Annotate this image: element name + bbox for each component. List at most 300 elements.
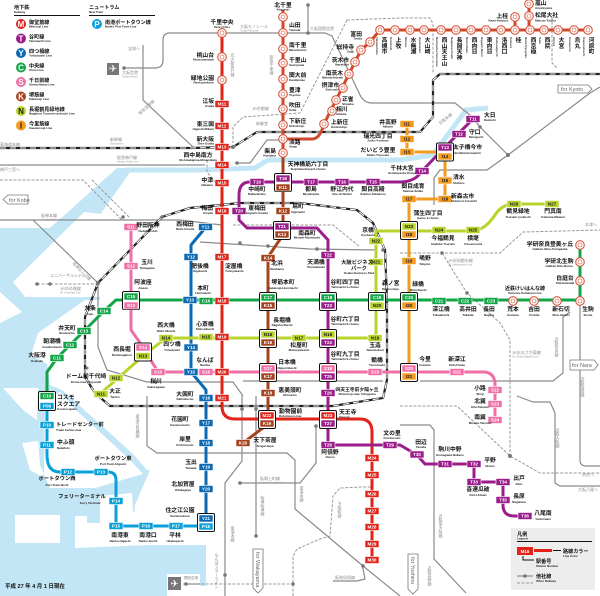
station names: Tanimachi and Imazatosuji: Zuiko 4-chome [367,138,389,142]
station names: west: Nishi-Umeda [176,227,194,231]
station boxes: Nagahori: N24 [435,228,444,233]
station names: west: 平林 [169,533,181,539]
station names: vertical row: 高槻市 [380,36,387,56]
station names: centre: 長堀橋 [273,318,291,324]
station names: north: Arashiyama [535,6,552,10]
legend: subway lines: 千日前線 [29,78,49,84]
station boxes: Sennichimae: S23 [491,402,500,407]
station names: Tanimachi and Imazatosuji: 大日 [484,113,496,119]
station names: east: 近鉄けいはんな線 [505,286,545,292]
station names: west: Nishi-Ohashi [157,329,175,333]
station names: west: Hirabayashi [166,539,184,543]
other railway labels: 新御堂 [256,120,268,126]
station names: Tanimachi and Imazatosuji: Tanimachi 9-chome [331,357,359,361]
station names: north: 淡路 [289,140,301,146]
station names: north: Sojiji [347,50,354,54]
station boxes: Nagahori: N22 [372,239,381,244]
station names: west: 中ふ頭 [57,440,74,446]
station boxes: Yotsubashi: Y14 [187,345,196,350]
station boxes: Nagahori [94,200,559,398]
legend: new tram [89,5,155,29]
station names: west: 四ツ橋 [163,342,181,348]
other railway labels: 神戸三宮へ [0,166,20,172]
station names: Tanimachi and Imazatosuji: Sembayashi-Omiya [388,171,416,175]
station names: west: Tamagawa [139,266,155,270]
station boxes: Port Town: P11 [43,443,51,448]
station names: north: Nakatsu [201,183,213,187]
station names: Tanimachi and Imazatosuji: Temmabashi [307,265,325,269]
arrow: for Yoshino [408,554,418,594]
station names: Tanimachi and Imazatosuji: 喜連瓜破 [466,487,490,493]
station names: east: Shin-Fukae [449,363,465,367]
other railway labels: 木津へ [585,221,597,227]
line: Port Town [47,406,206,526]
station names: west: Osakako [31,359,43,363]
station names: west: 桜川 [150,379,162,385]
station names: vertical row: 洛西口 [500,36,507,56]
station names: Tanimachi and Imazatosuji: Tanimachi 6-chome [331,322,359,326]
station names: north: Senri-Chuo [214,25,230,29]
station boxes: Sakaisuji: K11 [279,185,288,190]
station names: north: 上新庄 [331,120,348,126]
station names: Tanimachi and Imazatosuji: Kire-Uriwari [469,493,487,497]
station boxes: Midosuji: M15 [218,181,227,186]
station names: Tanimachi and Imazatosuji: 阿倍野 [321,450,339,456]
station names: west: Ferry Terminal [80,501,100,505]
station names: north: 富田 [350,32,362,38]
station names: vertical row: 西京極 [529,37,536,55]
station names: Tanimachi and Imazatosuji: 都島 [305,187,317,193]
station names: Tanimachi and Imazatosuji: 東梅田 [248,206,266,212]
station names: north: 南千里 [289,43,306,49]
station names: centre: Matsuyamachi [289,348,309,352]
station names: west: Taisho [110,395,120,399]
station boxes: Port Town: P18 [202,524,211,529]
other railway labels: 阪和貝塚線 [335,574,355,580]
station names: west: Trade Center-mae [56,428,82,432]
station names: Tanimachi and Imazatosuji: Moriguchi [469,135,483,139]
line: Sakaisuji [243,153,283,443]
legend: subway lines: I [20,122,22,130]
station names: east: 北巽 [474,399,486,405]
station names: east: 学研北生駒 [544,259,574,265]
legend: subway lines: 御堂筋線 [29,20,49,26]
station boxes: Tanimachi: T34 [499,480,507,485]
station boxes: Sakaisuji: K19 [263,421,272,426]
station names: west: Nodahanshin [138,229,158,233]
other railway labels: 近鉄長野線 [428,565,432,587]
station boxes: Nagahori: N26 [510,202,519,207]
station names: west: 大正 [109,389,121,395]
station names: east [410,207,594,425]
station boxes: Sakaisuji: K18 [264,391,273,396]
station boxes: Chuo: C12 [66,343,75,348]
station names: Tanimachi and Imazatosuji: 平野 [484,458,496,464]
station names: vertical row: Minase [404,37,408,48]
station names: vertical row: 河原町 [587,36,594,55]
station names: east: Midoribashi [410,288,427,292]
station boxes: Tanimachi: T23 [324,303,332,308]
other railway labels: 近鉄南大阪線 [438,513,444,539]
station boxes: Tanimachi: T35 [499,498,507,503]
station boxes: Sennichimae: S19 [371,370,380,375]
panel: map key: Line Color [563,554,579,558]
station boxes: Sennichimae: S15 [154,370,163,375]
legend: subway lines: 堺筋線 [29,92,44,98]
station names: east: Kintetsu Keihanna Line [508,291,542,295]
legend: subway lines: 長堀鶴見緑地線 [29,107,65,113]
legend: subway lines: 四つ橋線 [29,49,49,55]
station boxes: Tanimachi: T15 [369,180,377,185]
station names: Tanimachi and Imazatosuji: 守口 [469,130,481,136]
arrow: for Nara: for Nara [572,363,593,369]
station boxes: Sennichimae: S20 [405,366,414,371]
station boxes: Nagahori: N12 [112,376,121,381]
line: Nagahori Tsurumi-ryokuchi [100,204,552,394]
station names: north: Aikawa [336,112,347,116]
station boxes: Sennichimae: S17 [264,366,273,371]
station names: vertical row: 水無瀬 [409,36,416,56]
station names: east: 白庭台 [556,276,574,282]
station boxes: Yotsubashi: Y18 [202,441,211,446]
station names: east: 新石切 [552,307,570,313]
other railway labels: Hankai Uemachi Line [260,480,285,484]
station names: west: 花園町 [171,417,189,423]
legend: subway lines: Midosuji Line [29,24,48,28]
station boxes: Midosuji: M23 [324,413,333,418]
station names: north: Shin-Osaka [197,142,214,146]
station boxes: Sennichimae: S24 [491,418,500,423]
station names: Tanimachi and Imazatosuji: 出戸 [513,476,525,482]
legend: subway lines: Chuo Line [29,68,44,72]
station boxes: Port Town: P17 [172,524,181,529]
station names: Tanimachi and Imazatosuji: Shitennoji-mae Yuhigaoka [338,392,376,396]
station names: centre: 大国町 [176,392,194,398]
station boxes: Tanimachi: T29 [386,443,394,448]
station boxes: Midosuji: M14 [218,163,227,168]
other railway labels: 東海道本線 [0,141,20,147]
icon: Kansai Airport: ✈ [170,579,179,590]
station names: west: 西長堀 [113,347,131,353]
station names: vertical row: Nishi-Kyogoku [524,37,528,58]
station names: centre [176,203,400,448]
station names: north: 相川 [336,107,348,113]
station names: west: 朝潮橋 [43,339,61,345]
station names: east: Gakken Nara-Tomigaoka [533,247,568,251]
station boxes: Tanimachi: T25 [324,374,332,379]
station names: east: Minami-Tatsumi [469,421,491,425]
station names: vertical row: Rakusaiguchi [495,37,499,57]
station names: centre: Hommachi [195,291,211,295]
station names: north: Ryokuchikoen [193,80,214,84]
station names: vertical row: Nishiyama-Tennozan [435,37,439,67]
station names: west: 玉川 [141,260,153,266]
legend: subway lines: Nagahori Tsurumi-ryokuchi Line [29,112,75,116]
station names: Tanimachi and Imazatosuji: Itakano [383,124,393,128]
station boxes: Imazatosuji [400,120,452,380]
station boxes: Sennichimae: S18 [324,366,333,371]
legend: subway lines: M [18,20,25,29]
legend: new tram: ニュートラム [89,5,119,11]
icon: Osaka Airport [107,63,119,75]
station names: north: 上桂 [496,14,508,20]
station names: centre: Daikokucho [176,397,194,401]
arrow: for Kobe [3,195,30,204]
station boxes: Imazatosuji: I19 [406,259,413,264]
station names: Tanimachi and Imazatosuji: 駒川中野 [438,447,462,453]
station names: Tanimachi and Imazatosuji: Noe-Uchindai [332,192,352,196]
station boxes: Port Town [40,402,213,530]
station boxes: Midosuji: M17 [218,255,227,260]
station names: east: 門真南 [544,209,562,215]
station boxes: Yotsubashi [183,224,213,522]
station names: Tanimachi and Imazatosuji: 瑞光四丁目 [364,134,392,140]
station names: Tanimachi and Imazatosuji: Sekime-Seiiku [403,189,423,193]
other railway labels: ユニバーサルシティ [50,272,86,278]
station names: east: 蒲生四丁目 [414,211,442,217]
icon: Kansai Airport [168,575,200,590]
station names: north: Awaji [289,144,297,148]
station names: Tanimachi and Imazatosuji: Minami-Morimachi [294,236,320,240]
station names: west: Asashiobashi [42,345,62,349]
station names: centre: 堺筋本町 [271,280,295,286]
station names: Tanimachi and Imazatosuji: Miyakojima [303,192,319,196]
station names: west: Kujo [87,312,93,316]
station names: vertical row: 大宮 [557,36,564,50]
station names: north: 総持寺 [337,45,354,51]
station names: Tanimachi and Imazatosuji: Taishibashi-Imaichi [453,151,481,155]
station boxes: Port Town: P13 [97,470,106,475]
other railway labels: 南海汐見橋線 [136,413,140,439]
station names: Tanimachi and Imazatosuji: Sekime-Takadono [360,192,386,196]
station names: vertical row: Kawaramachi [582,37,586,57]
station boxes: Tanimachi: T11 [469,117,477,122]
station names: west: 野田阪神 [136,223,160,229]
line: Tanimachi [239,119,525,516]
line: Sennichimae [131,227,495,420]
panel: map key: Legend [517,536,528,540]
station names: east: 新深江 [448,357,466,363]
station boxes: Imazatosuji: I18 [406,232,413,237]
station names: vertical row: 西向日 [470,37,477,56]
station boxes: Yotsubashi: Y20 [202,487,211,492]
station names: north: Kunijima [263,154,276,158]
station names: east: Tsurumi-ryokuchi [505,215,531,219]
station boxes: Midosuji: M13 [218,145,227,150]
station boxes: Sakaisuji: K17 [264,374,273,379]
station boxes: Yotsubashi: Y17 [202,421,211,426]
station names: centre: Namba [200,363,210,367]
station boxes: Nagahori: N27 [548,202,557,207]
station boxes: Imazatosuji: I21 [406,374,413,379]
station names: east: 緑橋 [412,282,424,288]
station names: north: 山田 [289,23,301,29]
station names: Tanimachi and Imazatosuji: 南森町 [298,231,316,237]
station names: west: 弁天町 [58,326,76,332]
line: Imazatosuji [407,124,445,377]
legend: subway lines: 中央線 [29,64,44,70]
station boxes: Tanimachi: T20 [235,209,243,214]
station boxes: Midosuji: M24 [368,456,377,461]
station names: north: 千里山 [289,58,306,64]
station names: east: Kita-Tatsumi [471,405,489,409]
station names: north: Minamisenri [289,48,307,52]
station names: centre: 恵美須町 [278,388,302,394]
other railway labels: Osaka Airport [122,74,138,78]
JR lines [0,74,600,406]
station boxes: Chuo: C14 [100,309,109,314]
station names: Tanimachi and Imazatosuji: Fuminosato [384,436,401,440]
station boxes: Tanimachi: T27 [324,421,332,426]
station names: west: 阿波座 [134,280,152,286]
station boxes: Tanimachi: T21 [278,224,286,229]
station boxes: Nagahori: N21 [372,260,381,265]
station boxes: Nagahori: N14 [162,336,171,341]
station names: east: Kadoma-Minami [541,215,565,219]
other railway labels: 新幹線 [110,137,122,142]
other railway labels: Hankyu Kobe Line [117,160,139,164]
station boxes: Nagahori: N13 [139,354,148,359]
legend: new tram: P [94,20,100,29]
arrow: for Wakayama [253,549,263,593]
station names: east: 学研奈良登美ヶ丘 [527,242,573,248]
legend: new tram: 南港ポートタウン線 [105,20,151,26]
station boxes: Midosuji: M29 [368,542,377,547]
station names: east: 南巽 [474,415,486,421]
other railway labels: なんばスターライン [214,552,220,589]
station names: north: 東三国 [197,122,214,128]
station names: west: Tamade [185,466,197,470]
other railway labels: 阪神なんば線 [72,260,93,281]
other railway labels: JRおおさか東線 [512,350,541,355]
station names: east: Fukaebashi [433,313,449,317]
station boxes: Midosuji: M22 [263,413,272,418]
station names: Tanimachi and Imazatosuji: 田辺 [415,440,427,446]
station boxes: Port Town: P15 [112,524,121,529]
station names: north: Kitasenri [277,8,290,12]
station names: Tanimachi and Imazatosuji: 太子橋今市 [453,145,482,151]
other railway labels: 大阪空港 [122,70,138,75]
station names: west: フェリーターミナル [58,494,106,500]
station boxes: Nagahori: N15 [202,335,211,340]
station boxes: Midosuji: M19 [218,335,227,340]
station names: north [179,0,558,215]
station boxes: Sennichimae: S22 [491,388,500,393]
station names: Tanimachi and Imazatosuji: 四天王寺前夕陽ヶ丘 [335,388,379,393]
station names: Tanimachi and Imazatosuji: 中崎町 [248,187,266,193]
station names: centre: 天下茶屋 [253,438,277,444]
station names: Tanimachi and Imazatosuji: Yaominami [535,517,551,521]
station names: west: 住之江公園 [166,508,194,514]
other railway labels: Osaka Monorail [240,28,259,32]
station names: east: 生駒 [582,307,594,313]
arrow: for Wakayama: for Wakayama [254,552,260,588]
station names: west: 大阪港 [28,353,46,359]
station names: east: Shigino [420,262,431,266]
other railway labels: 宝塚へ [128,45,140,51]
legend: new tram: Nanko Port Town Line [105,24,137,28]
station names: east: 小路 [474,386,486,392]
station names: north: 豊津 [289,88,301,94]
station names: north: Senriyama [289,63,305,67]
station boxes: Tanimachi: T28 [324,443,332,448]
station names: vertical row: 烏丸 [573,36,580,50]
railway stations [35,3,512,586]
other railway labels: JR京都線 [252,105,269,111]
station names: east: 横堤 [467,236,479,242]
panel: map key: 凡例 [517,532,527,538]
other railway labels: Hanshin Main Line [41,218,63,222]
legend: subway lines [14,4,80,130]
station names: north: Higashi-Mikuni [193,127,214,131]
station boxes: Imazatosuji: I12 [404,137,411,142]
station names: vertical row: 大山崎 [423,36,430,55]
station names: north: 摂津市 [322,83,339,89]
icon: Kansai Airport: 関西空港 [184,575,198,580]
station names: north: Minami-Ibaraki [322,76,343,80]
station boxes: Nagahori: N18 [324,332,333,337]
panel: map key [511,528,595,590]
station boxes: Chuo: C18 [324,295,333,300]
station boxes: Chuo: C20 [405,295,414,300]
station names: east: 長田 [483,307,495,313]
other railway labels: 大阪国際空港 [310,25,334,31]
background water [0,108,488,596]
station names: centre: Shinsaibashi [196,327,214,331]
station names: vertical row: Katsura [509,37,513,49]
station names: east: Shiraniwadai [556,281,574,285]
other railway labels: 阪急宝塚線 [137,98,156,116]
station boxes: Imazatosuji: I20 [406,303,413,308]
station names: north: Settsushi [325,88,339,92]
station names: Tanimachi and Imazatosuji: だいどう豊里 [361,148,395,154]
panel: map key: Station Number [536,564,559,568]
station names: Tanimachi and Imazatosuji [246,111,552,521]
station boxes: Nagahori: N25 [469,228,478,233]
station boxes: Chuo: C22 [461,299,470,304]
station names: north: 下新庄 [289,119,306,125]
station names: centre: 大阪ビジネス [341,260,373,266]
station names: Tanimachi and Imazatosuji: Tanabe [416,445,426,449]
station boxes: Chuo: C13 [80,329,89,334]
icon: Osaka Airport: ✈ [109,64,117,75]
legend: subway lines: Sennichimae Line [29,82,55,86]
station boxes: Tanimachi: T18 [279,176,287,181]
station boxes: Tanimachi [232,116,532,520]
station names: centre: Ogimachi [291,210,305,214]
station names: Tanimachi and Imazatosuji: 井高野 [379,120,397,126]
station names: Tanimachi and Imazatosuji: 八尾南 [534,511,552,517]
station boxes: Sennichimae: S16 [202,370,211,375]
station names: Tanimachi and Imazatosuji: Tanimachi 4-chome [331,285,359,289]
station names: north: Nishinakajima-Minamikata [179,158,217,162]
station names: vertical row: 西山天王山 [440,37,447,67]
station names: Tanimachi and Imazatosuji: Shinmori-Furuichi [451,199,477,203]
legend: subway lines: N [18,107,24,116]
station names: vertical row: 東向日 [485,36,492,56]
station names: centre: 淀屋橋 [225,264,242,270]
station names: west: Yotsubashi [164,348,180,352]
station names: north: 茨木市 [332,58,349,64]
arrow: for Kyoto [558,85,592,93]
station names: centre: Kitahama [270,267,284,271]
station names: vertical row: Saiin [538,37,542,44]
station names: centre: Morinomiya [382,287,399,291]
station names: Tanimachi and Imazatosuji: Komagawa-Nakano [436,453,464,457]
station boxes: Tanimachi: T16 [338,180,346,185]
legend: new tram: New Tram [89,10,104,14]
station names: west: Nanko-Higashi [109,539,131,543]
